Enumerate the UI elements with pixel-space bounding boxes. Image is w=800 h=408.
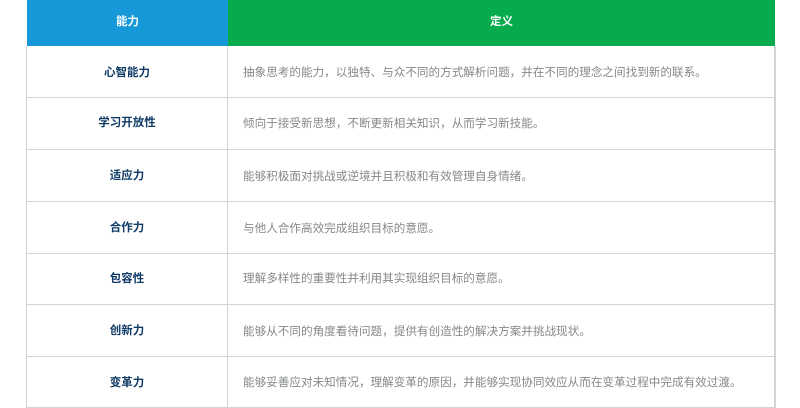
label: inclusiveness: 包容性 (110, 273, 144, 285)
row: openness to learning (98, 116, 544, 130)
row: mental ability (104, 66, 707, 79)
definition: openness to learning: 倾向于接受新思想，不断更新相关知识，从而学习新技能。 (243, 117, 544, 130)
definition: cooperation: 与他人合作高效完成组织目标的意愿。 (243, 222, 440, 235)
label: openness to learning: 学习开放性 (98, 117, 156, 129)
label: cooperation: 合作力 (110, 222, 144, 234)
definition: innovation: 能够从不同的角度看待问题，提供有创造性的解决方案并挑战现状。 (243, 325, 591, 338)
label: change ability: 变革力 (110, 377, 144, 389)
row: adaptability (110, 169, 533, 183)
row: cooperation (110, 221, 440, 235)
header: ability column (27, 0, 228, 46)
definition: mental ability: 抽象思考的能力，以独特、与众不同的方式解析问题，并在不同的理念之间找到新的联系。 (243, 66, 707, 79)
row: inclusiveness (110, 272, 510, 285)
definition: adaptability: 能够积极面对挑战或逆境并且积极和有效管理自身情绪。 (243, 170, 533, 183)
row: innovation (110, 324, 591, 338)
definition: inclusiveness: 理解多样性的重要性并利用其实现组织目标的意愿。 (243, 272, 510, 285)
label: adaptability: 适应力 (110, 170, 144, 182)
definition: change ability: 能够妥善应对未知情况，理解变革的原因，并能够实现协同效应从而在变革过程中完成有效过渡。 (243, 376, 742, 389)
header: ability column: 能力 (116, 16, 139, 28)
row: change ability (110, 376, 742, 389)
header: definition column: 定义 (490, 16, 513, 28)
label: mental ability: 心智能力 (104, 67, 150, 79)
header: definition column (228, 0, 775, 46)
label: innovation: 创新力 (110, 325, 144, 337)
